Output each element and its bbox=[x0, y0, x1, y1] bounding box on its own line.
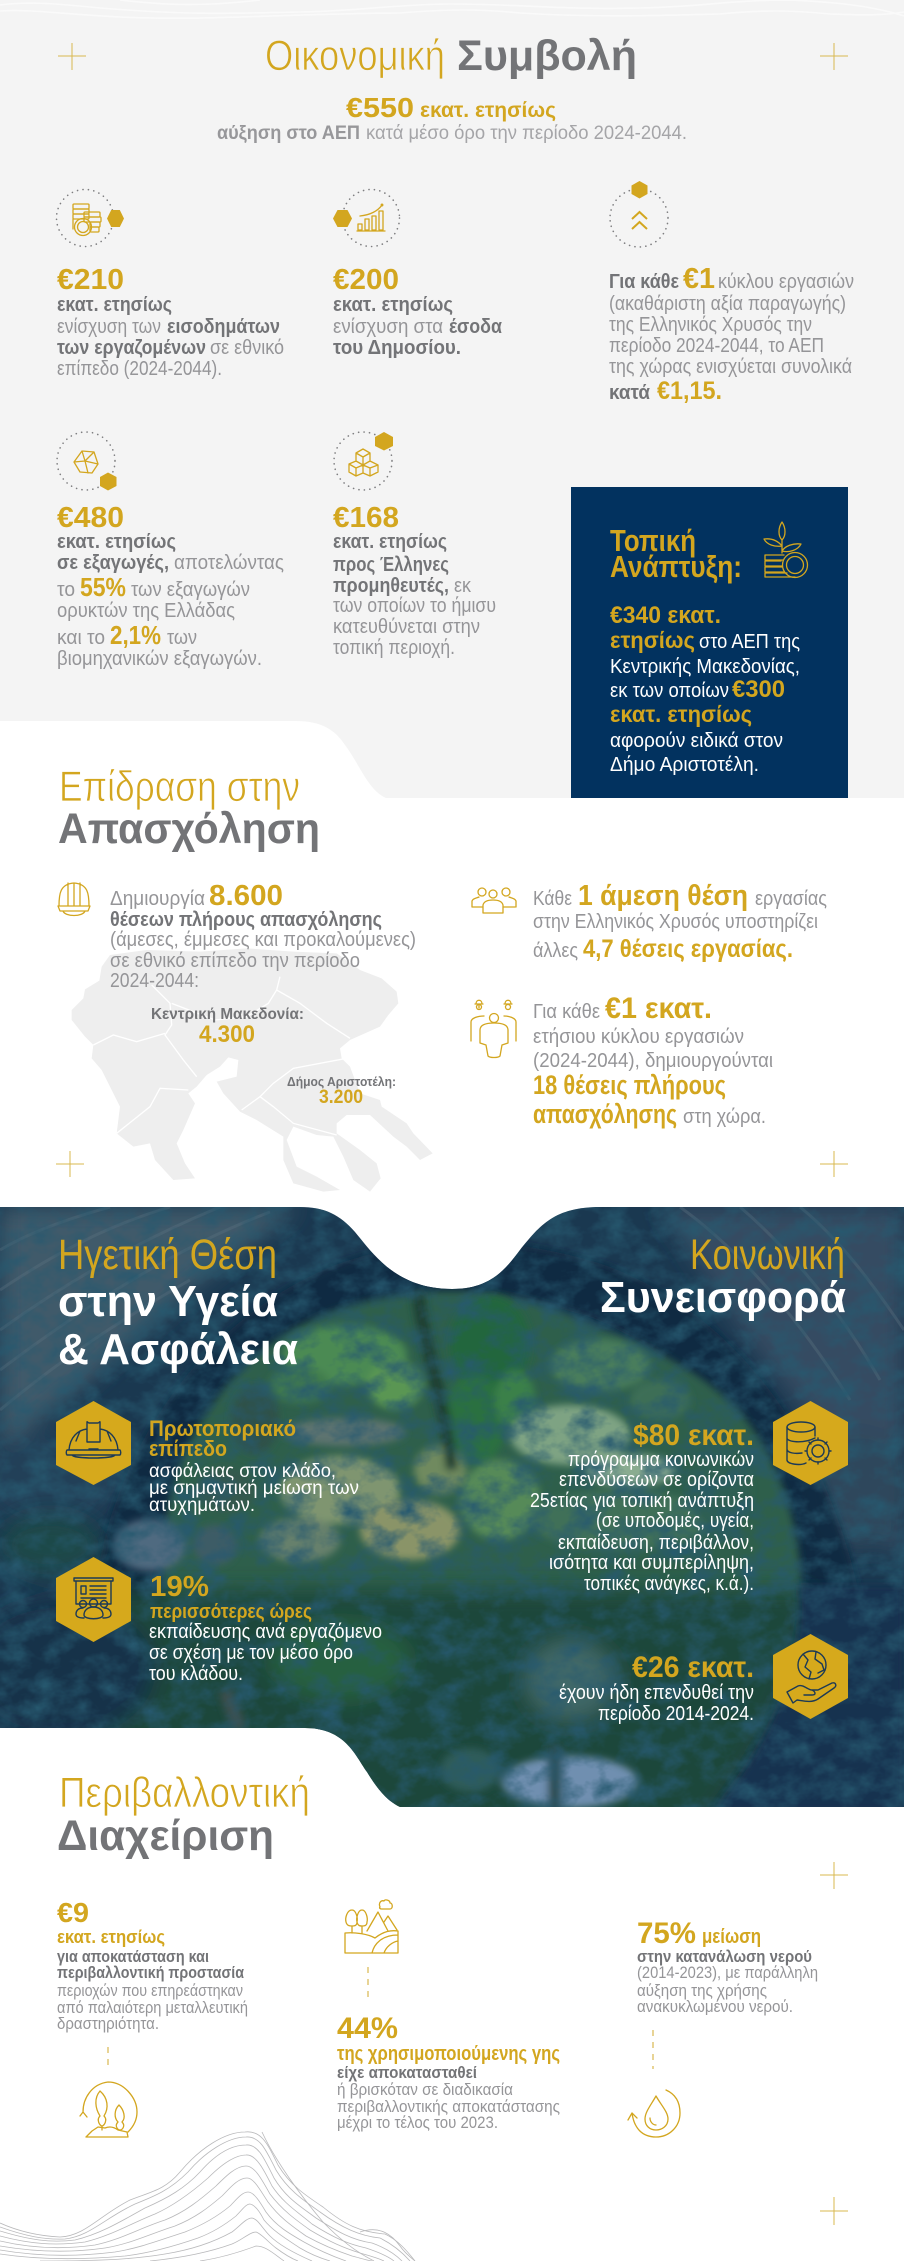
heading: economic contribution: Συμβολή bbox=[457, 32, 637, 80]
panel body text: αφορούν ειδικά στον bbox=[610, 730, 783, 752]
heading: environmental management bbox=[57, 1769, 310, 1860]
heading: health and safety: Ηγετική Θέση bbox=[58, 1231, 277, 1279]
icon: water recycling bbox=[628, 2090, 680, 2137]
stat: exports: ορυκτών της Ελλάδας bbox=[57, 600, 235, 622]
text: direct job multiplier: εργασίας bbox=[755, 888, 827, 910]
text: pioneering safety level: με σημαντική μείωση των bbox=[149, 1478, 359, 1499]
heading: economic contribution bbox=[265, 32, 637, 80]
text: 44 percent land: περιβαλλοντικής αποκατάστασης bbox=[337, 2097, 560, 2116]
icon: cross lower right bbox=[820, 1862, 848, 1889]
text: 26 million invested: έχουν ήδη επενδυθεί την bbox=[559, 1682, 754, 1704]
icon: trees in circle bbox=[80, 2082, 137, 2137]
icon: cross top left bbox=[58, 43, 86, 70]
text: 8,600 jobs: θέσεων πλήρους απασχόλησης bbox=[110, 909, 382, 931]
stat: 210 million: ενίσχυση των bbox=[57, 316, 161, 338]
text: direct job multiplier: Κάθε bbox=[533, 888, 572, 910]
text: 80 million programme: 25ετίας για τοπική ανάπτυξη bbox=[530, 1490, 754, 1512]
panel: environmental management bbox=[0, 1769, 848, 2261]
text: 8,600 jobs bbox=[110, 880, 416, 992]
stat: suppliers: προς Έλληνες bbox=[333, 554, 449, 576]
text: direct job multiplier: 1 άμεση θέση bbox=[578, 880, 748, 912]
panel body text: εκατ. ετησίως bbox=[610, 701, 752, 727]
stat: exports: αποτελώντας bbox=[174, 552, 284, 574]
text: 26 million invested bbox=[559, 1651, 754, 1725]
panel body text: Δήμο Αριστοτέλη. bbox=[610, 754, 759, 776]
text: 80 million programme: ισότητα και συμπερίληψη, bbox=[549, 1552, 754, 1574]
stat: exports: εκατ. ετησίως bbox=[57, 531, 176, 553]
icon: safety helmet bbox=[58, 883, 90, 916]
panel body text: €300 bbox=[732, 676, 785, 703]
heading: employment impact bbox=[58, 763, 320, 853]
text: 19 percent training: εκπαίδευσης ανά εργαζόμενο bbox=[149, 1621, 382, 1643]
text: 75 percent water: μείωση bbox=[702, 1926, 761, 1948]
map label: central Macedonia: Κεντρική Μακεδονία: bbox=[151, 1006, 304, 1023]
icon: coins bbox=[56, 190, 124, 246]
panel: local development bbox=[571, 487, 848, 798]
text: 9 million restoration: δραστηριότητα. bbox=[57, 2014, 159, 2033]
arrow: dashed connector left bbox=[107, 2047, 109, 2069]
stat: suppliers: κατευθύνεται στην bbox=[333, 616, 480, 638]
text: 9 million restoration bbox=[57, 1897, 248, 2033]
text: 26 million invested: €26 εκατ. bbox=[632, 1651, 754, 1684]
stat: exports: και το bbox=[57, 627, 105, 649]
text: direct job multiplier: στην Ελληνικός Χρυσός υποστηρίζει bbox=[533, 911, 818, 933]
text: 80 million programme: τοπικές ανάγκες, κ.ά.). bbox=[584, 1573, 754, 1595]
text: 75 percent water bbox=[637, 1917, 818, 2016]
text: 80 million programme bbox=[530, 1419, 754, 1595]
panel: employment impact bbox=[56, 763, 848, 1192]
text: 80 million programme: επενδύσεων σε ορίζοντα bbox=[559, 1469, 754, 1491]
text: 19 percent training: του κλάδου. bbox=[149, 1663, 243, 1685]
text: jobs per million: ετήσιου κύκλου εργασιών bbox=[533, 1026, 744, 1048]
stat: 200 million: €200 bbox=[333, 264, 399, 296]
arrow: dashed connector middle bbox=[367, 1967, 369, 2003]
illustration: contour mountain bbox=[0, 2132, 415, 2261]
text: pioneering safety level: Πρωτοποριακό bbox=[149, 1416, 296, 1441]
icon: helmet hexagon bbox=[56, 1401, 131, 1485]
text: 8,600 jobs: (άμεσες, έμμεσες και προκαλούμενες) bbox=[110, 929, 416, 951]
text: jobs per million: 18 θέσεις πλήρους bbox=[533, 1070, 726, 1100]
heading: health and safety: στην Υγεία bbox=[58, 1277, 278, 1326]
heading: employment impact: Επίδραση στην bbox=[59, 763, 300, 811]
headline figure bbox=[217, 92, 687, 144]
text: 19 percent training: περισσότερες ώρες bbox=[150, 1601, 312, 1623]
icon: cross mid right bbox=[820, 1151, 848, 1177]
stat: exports bbox=[57, 502, 284, 670]
panel: page background bbox=[0, 0, 904, 798]
arrow: dashed connector right bbox=[652, 2030, 654, 2069]
stat: 210 million: επίπεδο (2024-2044). bbox=[57, 358, 222, 380]
stat: exports: €480 bbox=[57, 502, 124, 534]
panel: photo band health and social bbox=[0, 1200, 904, 1830]
text: 8,600 jobs: σε εθνικό επίπεδο την περίοδο bbox=[110, 950, 360, 972]
stat: exports: των εξαγωγών bbox=[131, 579, 250, 601]
text: 9 million restoration: περιοχών που επηρεάστηκαν bbox=[57, 1981, 243, 2000]
stat: 210 million: εισοδημάτων bbox=[167, 316, 280, 338]
icon: globe in hand hexagon bbox=[773, 1634, 848, 1719]
text: jobs per million bbox=[533, 992, 773, 1129]
headline figure: αύξηση στο ΑΕΠ bbox=[217, 123, 360, 144]
text: direct job multiplier: 4,7 θέσεις εργασίας. bbox=[583, 935, 793, 963]
panel body text: €340 εκατ. bbox=[610, 602, 721, 629]
stat: suppliers: εκατ. ετησίως bbox=[333, 531, 447, 553]
text: pioneering safety level: ασφάλειας στον κλάδο, bbox=[149, 1461, 336, 1482]
heading: environmental management: Διαχείριση bbox=[57, 1812, 274, 1860]
icon: supplier cubes bbox=[334, 432, 393, 490]
text: pioneering safety level: επίπεδο bbox=[149, 1436, 227, 1461]
icon: growth chart bbox=[333, 190, 400, 246]
text: jobs per million: στη χώρα. bbox=[683, 1106, 766, 1128]
stat: exports: βιομηχανικών εξαγωγών. bbox=[57, 648, 262, 670]
text: 19 percent training: σε σχέση με τον μέσο όρο bbox=[149, 1642, 353, 1664]
panel: economic contribution bbox=[56, 32, 854, 798]
stat: multiplier: περίοδο 2024-2044, το ΑΕΠ bbox=[609, 335, 824, 357]
panel body text: στο ΑΕΠ της bbox=[699, 631, 800, 653]
text: 8,600 jobs: Δημιουργία bbox=[110, 888, 205, 910]
panel heading bbox=[610, 523, 742, 584]
text: jobs per million: (2024-2044), δημιουργούνται bbox=[533, 1050, 773, 1072]
stat: exports: 2,1% bbox=[110, 620, 161, 650]
text: 80 million programme: εκπαίδευση, περιβάλλον, bbox=[558, 1532, 754, 1554]
headline figure: €550 bbox=[346, 92, 414, 123]
stat: multiplier: Για κάθε bbox=[609, 271, 679, 293]
text: direct job multiplier: άλλες bbox=[533, 940, 578, 962]
photo background: stone bridge and forest bbox=[0, 1200, 904, 1830]
text: 9 million restoration: περιβαλλοντική προστασία bbox=[57, 1963, 244, 1982]
text: 80 million programme: πρόγραμμα κοινωνικών bbox=[568, 1449, 754, 1471]
text: 75 percent water: (2014-2023), με παράλληλη bbox=[637, 1963, 818, 1982]
text: 19 percent training: 19% bbox=[150, 1571, 209, 1603]
icon: people group bbox=[472, 888, 516, 913]
stat: 200 million: εκατ. ετησίως bbox=[333, 294, 453, 316]
panel body text bbox=[610, 602, 800, 776]
text: 44 percent land: 44% bbox=[337, 2012, 398, 2045]
stat: exports: σε εξαγωγές, bbox=[57, 552, 169, 574]
panel heading: Ανάπτυξη: bbox=[610, 549, 742, 584]
heading: social contribution bbox=[600, 1231, 846, 1322]
text: pioneering safety level: ατυχημάτων. bbox=[149, 1495, 255, 1516]
text: 9 million restoration: εκατ. ετησίως bbox=[57, 1927, 165, 1947]
heading: economic contribution: Οικονομική bbox=[265, 32, 445, 80]
text: 9 million restoration: €9 bbox=[57, 1897, 89, 1928]
heading: health and safety: & Ασφάλεια bbox=[58, 1325, 298, 1374]
text: 8,600 jobs: 8.600 bbox=[209, 880, 283, 912]
text: 8,600 jobs: 2024-2044: bbox=[110, 970, 199, 992]
panel body text: ετησίως bbox=[610, 627, 695, 653]
stat: 200 million bbox=[333, 264, 503, 359]
map label: Aristotle municipality: 3.200 bbox=[319, 1087, 363, 1108]
text: 9 million restoration: για αποκατάσταση και bbox=[57, 1947, 209, 1966]
text: 19 percent training bbox=[149, 1571, 382, 1685]
heading: social contribution: Συνεισφορά bbox=[600, 1273, 846, 1322]
stat: multiplier: (ακαθάριστη αξία παραγωγής) bbox=[609, 293, 846, 315]
text: 26 million invested: περίοδο 2014-2024. bbox=[598, 1703, 754, 1725]
heading: health and safety bbox=[58, 1231, 298, 1374]
text: direct job multiplier bbox=[533, 880, 827, 963]
text: 75 percent water: στην κατανάλωση νερού bbox=[637, 1947, 812, 1966]
stat: 200 million: του Δημοσίου. bbox=[333, 337, 461, 359]
text: jobs per million: €1 εκατ. bbox=[605, 992, 712, 1025]
stat: 210 million: €210 bbox=[57, 264, 124, 296]
stat: 200 million: έσοδα bbox=[449, 316, 503, 338]
stat: multiplier bbox=[609, 263, 854, 405]
stat: 200 million: ενίσχυση στα bbox=[333, 316, 443, 338]
text: 44 percent land: ή βρισκόταν σε διαδικασία bbox=[337, 2080, 513, 2099]
icon: training hexagon bbox=[56, 1557, 131, 1642]
text: 80 million programme: (σε υποδομές, υγεία, bbox=[596, 1510, 754, 1532]
map label: Aristotle municipality: Δήμος Αριστοτέλη: bbox=[287, 1074, 396, 1089]
icon: plant and coins bbox=[764, 522, 808, 578]
text: jobs per million: απασχόλησης bbox=[533, 1099, 677, 1129]
text: 9 million restoration: από παλαιότερη μεταλλευτική bbox=[57, 1998, 248, 2017]
map: central Macedonia bbox=[72, 948, 433, 1192]
headline figure: κατά μέσο όρο την περίοδο 2024-2044. bbox=[366, 123, 687, 144]
stat: suppliers bbox=[333, 502, 496, 659]
icon: database gear hexagon bbox=[773, 1401, 848, 1485]
stat: multiplier: της Ελληνικός Χρυσός την bbox=[609, 314, 812, 336]
text: 75 percent water: ανακυκλωμένου νερού. bbox=[637, 1997, 793, 2016]
text: jobs per million: Για κάθε bbox=[533, 1001, 600, 1023]
text: 44 percent land: είχε αποκατασταθεί bbox=[337, 2063, 477, 2082]
text: 44 percent land: μέχρι το τέλος του 2023. bbox=[337, 2113, 498, 2132]
text: 44 percent land: της χρησιμοποιούμενης γης bbox=[337, 2043, 560, 2065]
panel heading: Τοπική bbox=[610, 523, 696, 558]
icon: landscape bbox=[345, 1900, 398, 1953]
stat: exports: 55% bbox=[80, 572, 126, 602]
stat: exports: το bbox=[57, 579, 75, 601]
panel body text: Κεντρικής Μακεδονίας, bbox=[610, 656, 800, 678]
map label: central Macedonia bbox=[151, 1006, 304, 1048]
stat: multiplier: €1,15. bbox=[657, 377, 722, 405]
icon: cross mid left bbox=[56, 1151, 84, 1177]
stat: exports: των bbox=[167, 627, 197, 649]
stat: suppliers: τοπική περιοχή. bbox=[333, 637, 455, 659]
text: 80 million programme: $80 εκατ. bbox=[633, 1419, 754, 1452]
headline figure: εκατ. ετησίως bbox=[420, 99, 556, 122]
stat: 210 million: σε εθνικό bbox=[210, 337, 284, 359]
map label: central Macedonia: 4.300 bbox=[199, 1021, 255, 1048]
icon: mineral rock bbox=[57, 432, 116, 490]
stat: 210 million bbox=[57, 264, 284, 380]
heading: employment impact: Απασχόληση bbox=[58, 805, 320, 853]
icon: workers bbox=[471, 1000, 516, 1058]
text: pioneering safety level bbox=[149, 1416, 359, 1516]
stat: multiplier: €1 bbox=[683, 263, 715, 295]
stat: suppliers: €168 bbox=[333, 502, 399, 534]
panel body text: εκ των οποίων bbox=[610, 680, 729, 702]
icon: double chevron up bbox=[610, 181, 668, 247]
stat: suppliers: προμηθευτές, bbox=[333, 575, 449, 597]
icon: cross top right bbox=[820, 43, 848, 70]
heading: environmental management: Περιβαλλοντική bbox=[59, 1769, 310, 1817]
stat: 210 million: των εργαζομένων bbox=[57, 337, 206, 359]
text: 75 percent water: αύξηση της χρήσης bbox=[637, 1981, 767, 2000]
text: 44 percent land bbox=[337, 2012, 560, 2132]
stat: multiplier: κύκλου εργασιών bbox=[718, 271, 854, 293]
map label: Aristotle municipality bbox=[287, 1074, 396, 1108]
stat: 210 million: εκατ. ετησίως bbox=[57, 294, 172, 316]
text: 75 percent water: 75% bbox=[637, 1917, 696, 1950]
stat: multiplier: κατά bbox=[609, 382, 651, 404]
stat: multiplier: της χώρας ενισχύεται συνολικά bbox=[609, 356, 852, 378]
stat: suppliers: των οποίων το ήμισυ bbox=[333, 595, 496, 617]
stat: suppliers: εκ bbox=[454, 575, 472, 597]
icon: cross bottom right bbox=[820, 2197, 848, 2225]
heading: social contribution: Κοινωνική bbox=[690, 1231, 845, 1279]
